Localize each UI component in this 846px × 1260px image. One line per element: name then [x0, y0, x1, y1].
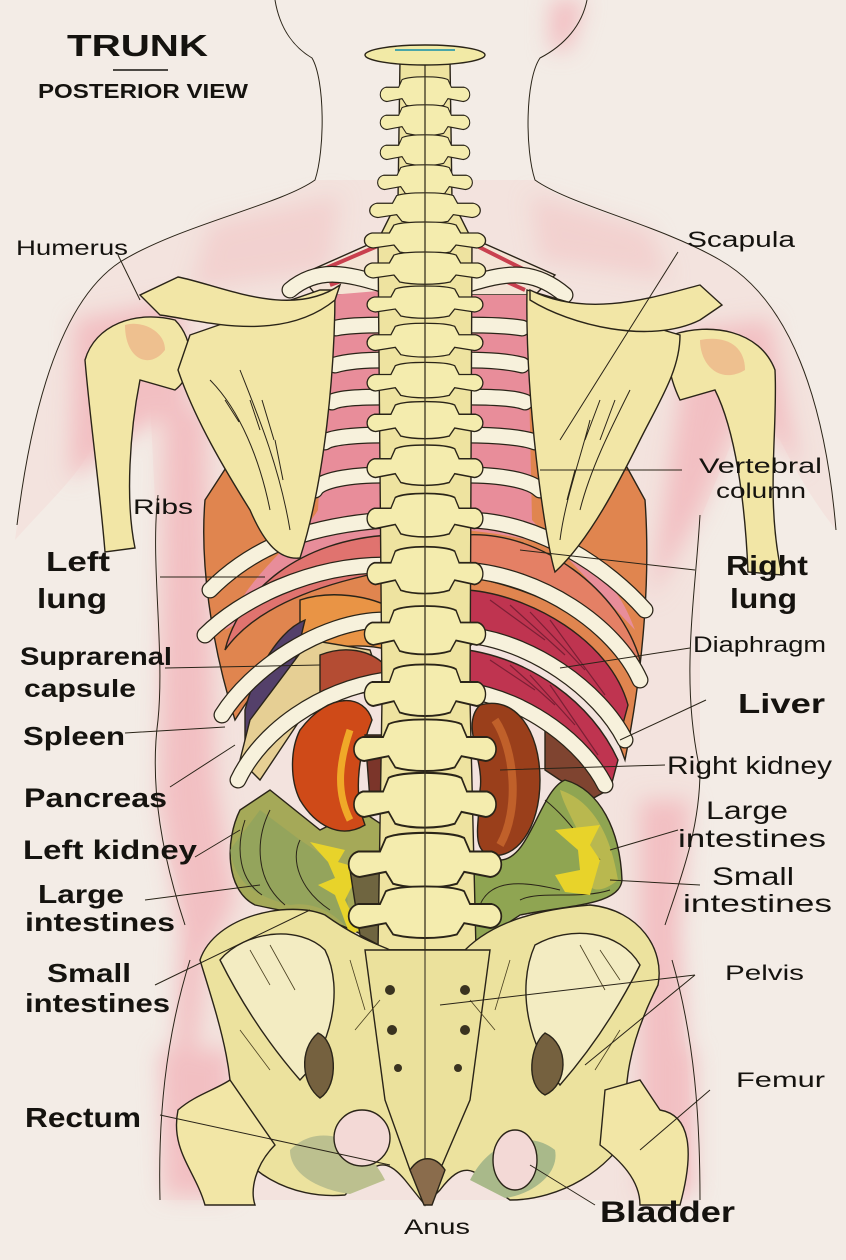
right scapula — [527, 285, 722, 572]
left labels: Large — [38, 879, 124, 909]
right lung, diaphragm and ribs — [465, 235, 647, 800]
left labels: intestines — [25, 988, 170, 1018]
right labels: Anus — [404, 1216, 470, 1239]
right labels: Large — [706, 797, 788, 825]
title — [38, 28, 248, 103]
left labels: Ribs — [133, 496, 193, 519]
left humerus — [85, 317, 190, 552]
left labels: Humerus — [16, 237, 128, 260]
right labels: Femur — [736, 1069, 825, 1092]
left kidney — [292, 701, 392, 831]
right humerus — [668, 329, 782, 575]
right labels: Small — [712, 863, 794, 891]
intestines left — [230, 790, 390, 950]
vertebral column — [349, 45, 501, 950]
left labels — [16, 237, 197, 1133]
right labels: Right — [726, 550, 808, 581]
right labels: intestines — [683, 890, 832, 918]
left lung and ribs — [204, 235, 395, 780]
right labels: intestines — [678, 825, 826, 853]
left labels: Pancreas — [24, 783, 167, 813]
right labels: Liver — [738, 688, 825, 719]
left labels: Suprarenal — [20, 643, 172, 671]
left labels: Small — [47, 958, 131, 988]
left labels: Left — [46, 546, 110, 577]
right labels: Vertebral — [699, 455, 822, 478]
intestines right — [470, 780, 622, 945]
left labels: lung — [37, 583, 107, 614]
right femur — [600, 1080, 688, 1205]
title: TRUNK — [67, 28, 209, 63]
left labels: Left kidney — [23, 835, 197, 865]
left labels: Rectum — [25, 1102, 141, 1133]
left femur — [176, 1080, 275, 1205]
left labels: intestines — [25, 907, 175, 937]
left scapula — [140, 277, 340, 558]
right labels: lung — [730, 583, 797, 614]
leader lines — [118, 252, 710, 1205]
right labels: Diaphragm — [693, 632, 826, 657]
title: POSTERIOR VIEW — [38, 81, 248, 103]
right labels: Bladder — [600, 1196, 735, 1229]
right labels: column — [716, 480, 806, 503]
left labels: capsule — [24, 675, 136, 703]
right labels: Right kidney — [667, 752, 833, 780]
right kidney — [472, 703, 540, 856]
pelvis — [200, 905, 659, 1205]
right labels: Pelvis — [725, 962, 804, 985]
right labels — [404, 227, 833, 1239]
right labels: Scapula — [687, 227, 796, 252]
left labels: Spleen — [23, 721, 125, 751]
